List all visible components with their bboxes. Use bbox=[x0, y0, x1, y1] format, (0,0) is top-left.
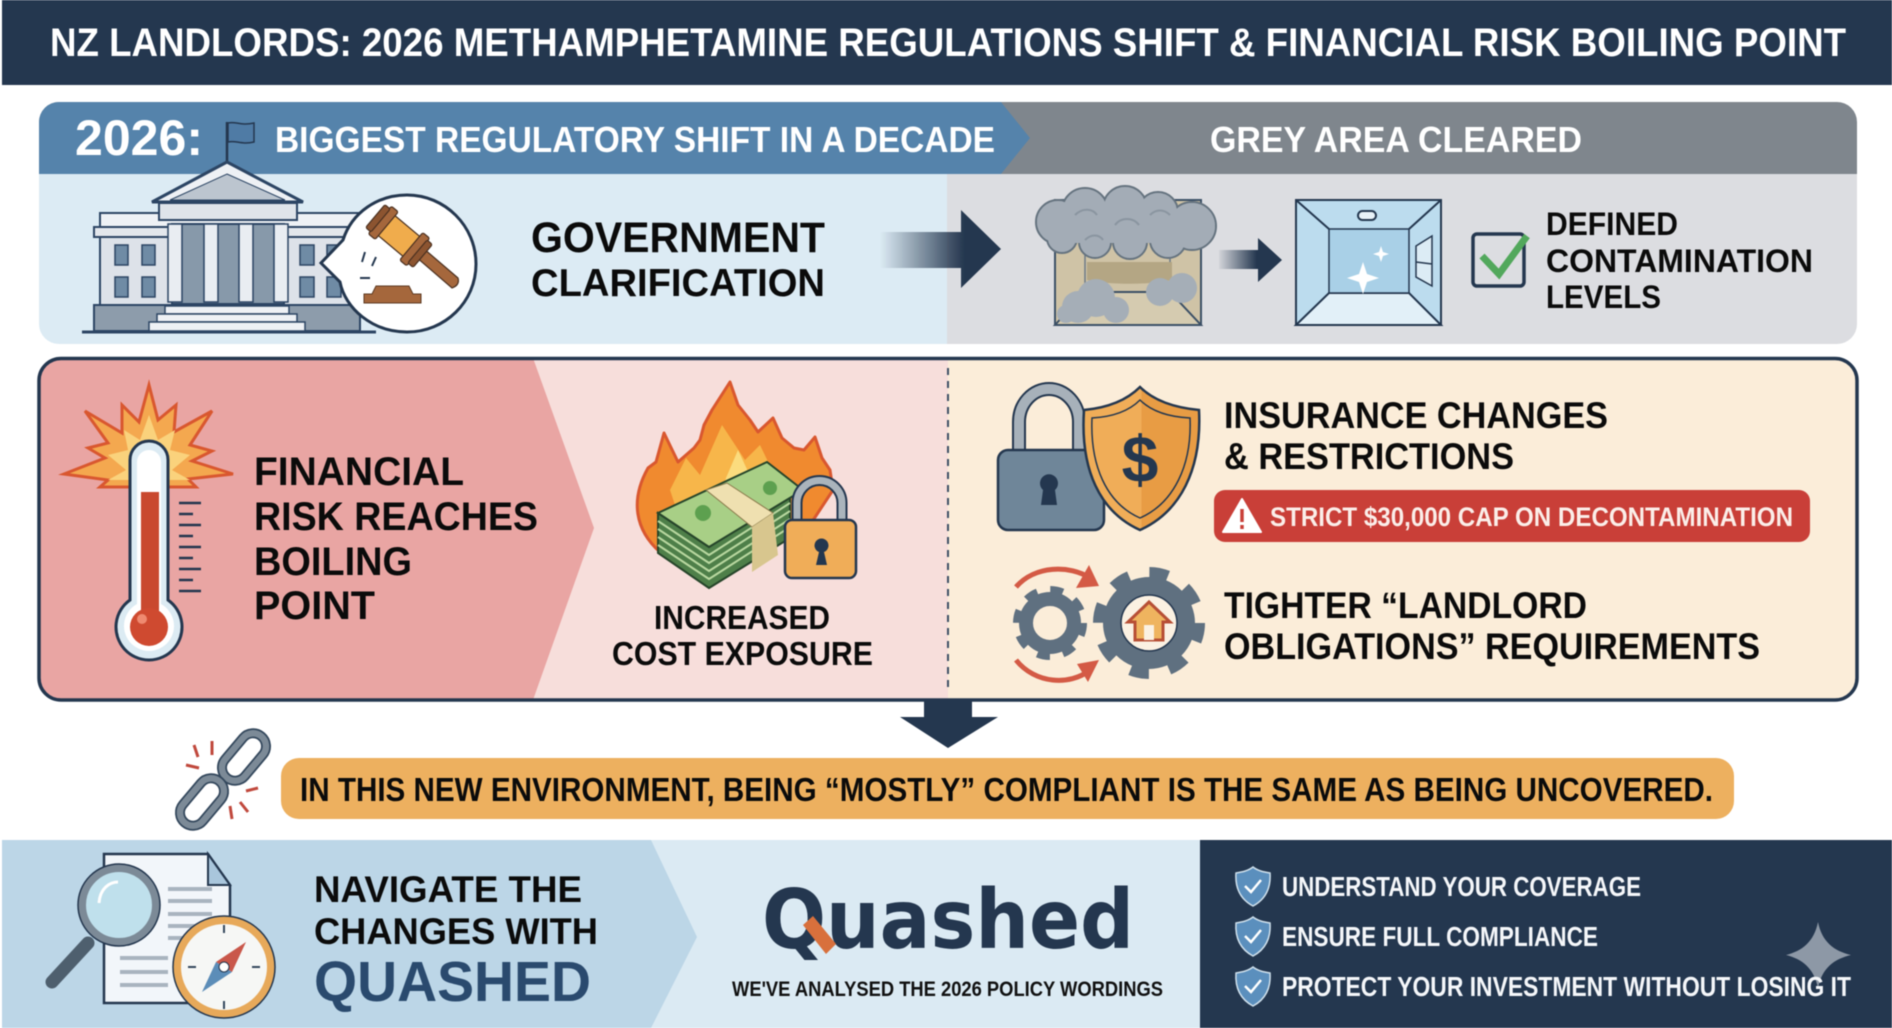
text: tighter landlord obligations: OBLIGATIONS” REQUIREMENTS bbox=[1224, 626, 1760, 667]
text: insurance changes and restrictions: INSURANCE CHANGES bbox=[1224, 395, 1608, 436]
benefit: protect your investment bbox=[1236, 967, 1851, 1006]
text: defined contamination levels: CONTAMINATION bbox=[1546, 243, 1813, 279]
callout: strict cap bbox=[1214, 490, 1810, 542]
callout: mostly compliant bbox=[281, 758, 1734, 819]
icon: flag bbox=[227, 122, 254, 162]
icon: burning money with padlock bbox=[637, 382, 856, 588]
heading: 2026: 2026: bbox=[75, 110, 203, 166]
icon: lock and shield bbox=[998, 387, 1199, 530]
text: insurance changes and restrictions: & RESTRICTIONS bbox=[1224, 436, 1514, 477]
text: government clarification: CLARIFICATION bbox=[531, 262, 825, 305]
icon: document, magnifier and compass bbox=[52, 854, 275, 1018]
arrow: clarification to cleared bbox=[880, 210, 1001, 288]
arrow: down bbox=[900, 699, 998, 748]
text: financial risk reaches boiling point: FINANCIAL bbox=[254, 450, 464, 494]
text: policy wordings: WE'VE ANALYSED THE 2026 POLICY WORDINGS bbox=[732, 978, 1163, 1001]
text: navigate the changes with bbox=[314, 869, 598, 952]
icon: checkbox bbox=[1473, 234, 1527, 286]
text: financial risk reaches boiling point: BOILING bbox=[254, 540, 412, 584]
text: defined contamination levels bbox=[1546, 206, 1813, 315]
logo: Quashed: Quashed bbox=[762, 873, 1134, 968]
icon: clean room bbox=[1296, 200, 1441, 325]
icon: smoky room bbox=[1036, 186, 1216, 325]
text: increased cost exposure: COST EXPOSURE bbox=[612, 635, 873, 672]
icon: lock and shield: $ bbox=[1122, 422, 1158, 496]
icon: thermometer bbox=[64, 385, 233, 660]
text: navigate the changes with: CHANGES WITH bbox=[314, 911, 598, 952]
icon: gavel speech bubble bbox=[321, 195, 476, 332]
heading: grey area cleared: GREY AREA CLEARED bbox=[1210, 119, 1582, 160]
panel: benefits bbox=[1200, 840, 1892, 1028]
arrow: smoky to clean room bbox=[1219, 238, 1282, 282]
text: navigate the changes with: NAVIGATE THE bbox=[314, 869, 582, 910]
callout: strict cap: STRICT $30,000 CAP ON DECONTAMINATION bbox=[1270, 502, 1793, 532]
callout: mostly compliant: IN THIS NEW ENVIRONMENT, BEING “MOSTLY” COMPLIANT IS THE SAME AS BEING UNCOVERED. bbox=[300, 771, 1713, 808]
text: tighter landlord obligations bbox=[1224, 585, 1760, 667]
icon: government building bbox=[82, 162, 376, 332]
text: government clarification: GOVERNMENT bbox=[531, 214, 825, 262]
benefit: ensure full compliance: ENSURE FULL COMPLIANCE bbox=[1282, 921, 1598, 952]
icon: broken chain bbox=[175, 728, 271, 831]
text: increased cost exposure: INCREASED bbox=[654, 599, 830, 636]
heading: biggest regulatory shift: BIGGEST REGULATORY SHIFT IN A DECADE bbox=[275, 119, 995, 160]
icon: warning triangle bbox=[1223, 499, 1261, 532]
text: financial risk reaches boiling point: RISK REACHES bbox=[254, 495, 538, 539]
text: financial risk reaches boiling point bbox=[254, 450, 538, 628]
text: government clarification bbox=[531, 214, 825, 305]
benefit: understand your coverage: UNDERSTAND YOUR COVERAGE bbox=[1282, 871, 1641, 902]
benefit: understand your coverage bbox=[1236, 867, 1641, 906]
text: defined contamination levels: DEFINED bbox=[1546, 206, 1678, 242]
panel: navigate with Quashed bbox=[2, 840, 1200, 1028]
title banner bbox=[2, 0, 1892, 85]
text: financial risk reaches boiling point: POINT bbox=[254, 584, 375, 628]
text: defined contamination levels: LEVELS bbox=[1546, 279, 1661, 315]
icon: sparkle bbox=[1786, 922, 1851, 988]
text: increased cost exposure bbox=[612, 599, 873, 672]
icon: gears with arrows bbox=[1016, 565, 1197, 682]
text: insurance changes and restrictions bbox=[1224, 395, 1608, 477]
panel: financial risk and obligations bbox=[39, 358, 1857, 700]
panel: regulatory shift bbox=[39, 102, 1857, 344]
text: tighter landlord obligations: TIGHTER “LANDLORD bbox=[1224, 585, 1587, 626]
icon: burst bbox=[64, 385, 233, 487]
text: Quashed: QUASHED bbox=[314, 950, 591, 1014]
benefit: ensure full compliance bbox=[1236, 917, 1598, 956]
